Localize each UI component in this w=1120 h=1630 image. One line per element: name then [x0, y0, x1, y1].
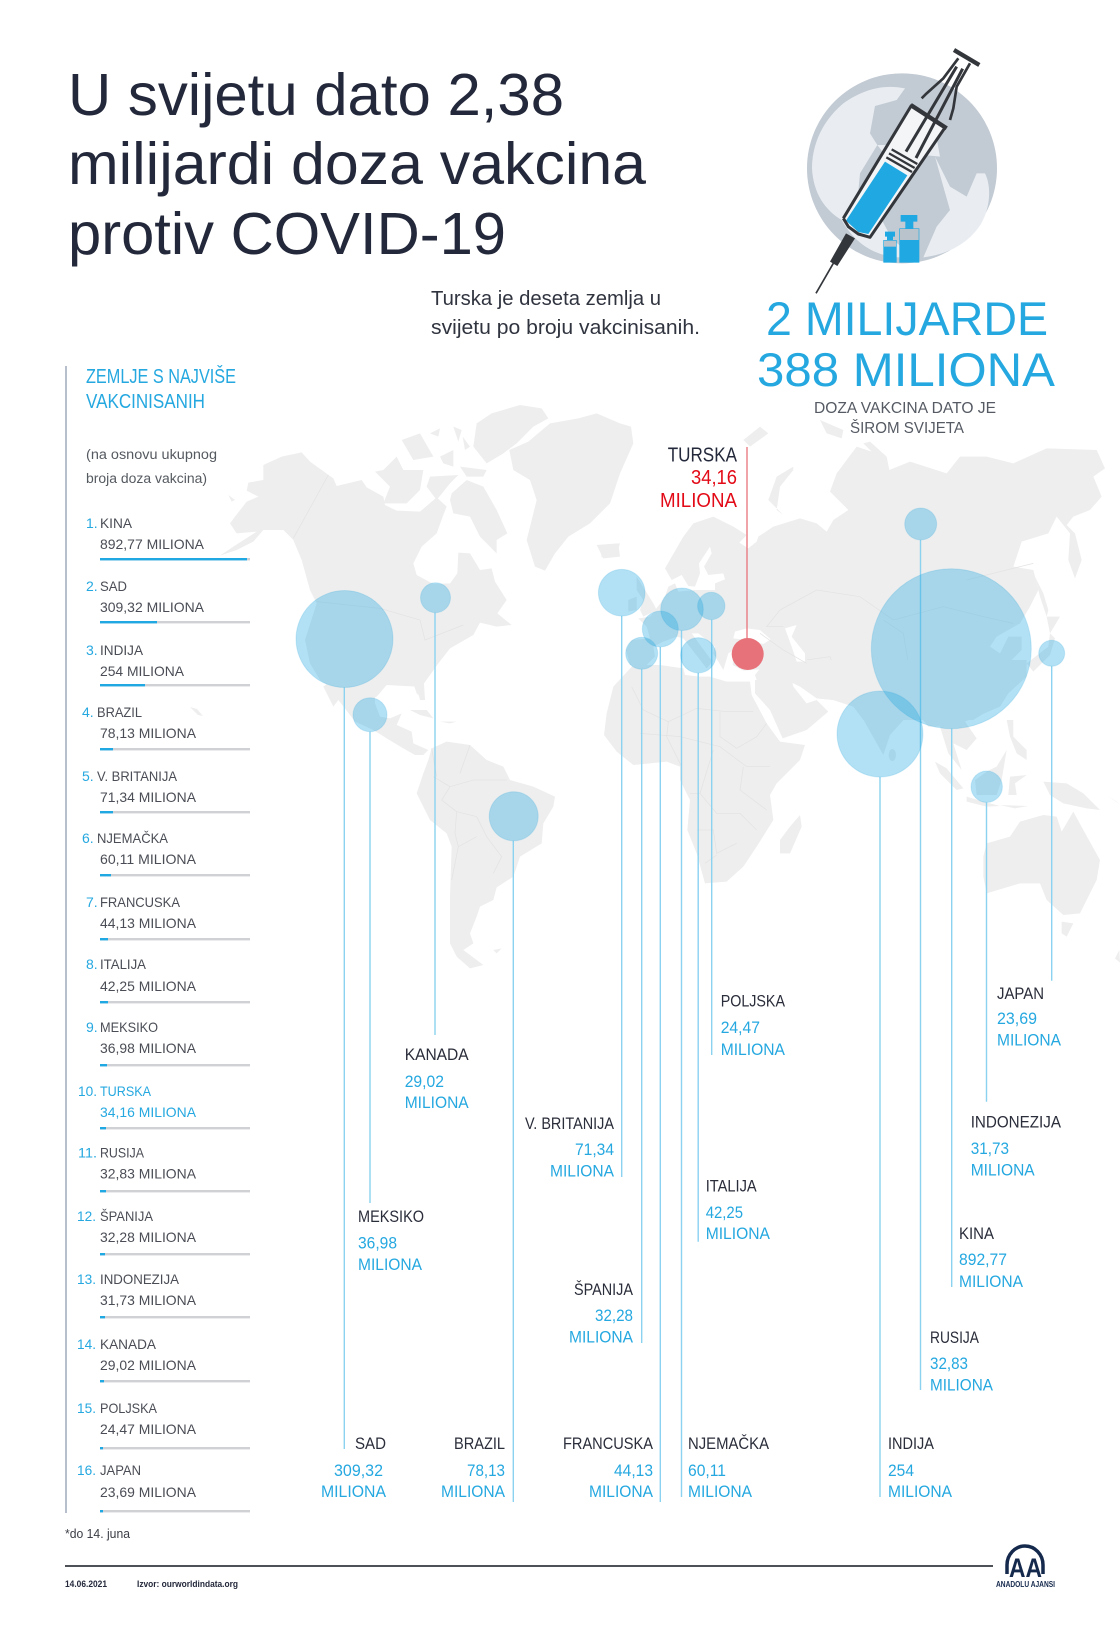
big number caption: ŠIROM SVIJETA	[850, 420, 965, 437]
title: U svijetu dato 2,38	[68, 62, 564, 128]
label: Kina: 892,77	[959, 1250, 1007, 1269]
row 7	[86, 894, 250, 940]
row 12: ŠPANIJA	[100, 1208, 154, 1224]
row 9	[86, 1019, 250, 1066]
list heading: VAKCINISANIH	[86, 391, 205, 413]
label: Poljska: MILIONA	[721, 1040, 786, 1059]
row 5: V. BRITANIJA	[97, 768, 178, 784]
row 13: INDONEZIJA	[100, 1271, 180, 1287]
label: Kina: KINA	[959, 1224, 995, 1243]
icon: globe with syringe and vials	[807, 50, 997, 293]
label: Brazil: MILIONA	[441, 1482, 506, 1501]
label: Rusija: RUSIJA	[930, 1328, 980, 1347]
label: Brazil	[441, 1434, 506, 1501]
label: Španija: ŠPANIJA	[574, 1280, 634, 1299]
row 11: RUSIJA	[100, 1144, 145, 1160]
label: Španija: 32,28	[595, 1306, 633, 1325]
row 2	[86, 578, 250, 623]
label: Japan: 23,69	[997, 1009, 1037, 1028]
row 13: 13.	[77, 1271, 96, 1287]
vials	[883, 215, 919, 263]
big number: 2 MILIJARDE	[766, 292, 1048, 345]
label: Italija	[706, 1177, 771, 1243]
label: Francuska: 44,13	[614, 1461, 653, 1480]
label: Italija: MILIONA	[706, 1224, 771, 1243]
label: Rusija	[930, 1328, 994, 1395]
world map	[190, 405, 1120, 968]
row 3: 254 MILIONA	[100, 663, 185, 679]
row 1: 892,77 MILIONA	[100, 536, 205, 552]
icon: Anadolu Ajansi logo: AA	[1009, 1553, 1042, 1583]
row 4: BRAZIL	[97, 704, 142, 720]
icon: Anadolu Ajansi logo: ANADOLU AJANSI	[996, 1580, 1055, 1589]
list note: broja doza vakcina)	[86, 471, 207, 486]
label: Kina	[959, 1224, 1024, 1291]
row 14	[77, 1336, 250, 1382]
label: Francuska: FRANCUSKA	[563, 1434, 654, 1453]
label: Japan	[997, 984, 1062, 1050]
label: Japan: JAPAN	[997, 984, 1044, 1003]
label: Poljska	[721, 992, 786, 1059]
footer date and source	[65, 1579, 238, 1590]
row 13	[77, 1271, 250, 1318]
label: Indonezija: INDONEZIJA	[971, 1113, 1062, 1132]
list note: (na osnovu ukupnog	[86, 447, 217, 462]
label: V. Britanija: MILIONA	[550, 1162, 615, 1181]
label: Njemačka: MILIONA	[688, 1482, 753, 1501]
row 8	[86, 956, 250, 1003]
row 15: POLJSKA	[100, 1400, 158, 1416]
row 15	[77, 1400, 250, 1449]
callout: Turska: 34,16	[691, 467, 737, 489]
label: Indonezija: MILIONA	[971, 1161, 1035, 1180]
row 10	[78, 1083, 250, 1129]
label: Španija	[569, 1280, 634, 1347]
row 1	[86, 515, 250, 560]
big number: 388 MILIONA	[757, 343, 1056, 396]
label: Poljska: POLJSKA	[721, 992, 786, 1011]
label: Italija: 42,25	[706, 1203, 743, 1222]
row 16: 23,69 MILIONA	[100, 1484, 197, 1500]
row 6: 60,11 MILIONA	[100, 851, 197, 867]
label: Italija: ITALIJA	[706, 1177, 757, 1196]
row 13: 31,73 MILIONA	[100, 1292, 197, 1308]
list heading	[86, 365, 236, 413]
label: Indonezija: 31,73	[971, 1139, 1009, 1158]
icon: Anadolu Ajansi logo	[996, 1546, 1055, 1589]
footnote: *do 14. juna	[65, 1526, 131, 1541]
big number caption	[814, 400, 996, 437]
label: Japan: MILIONA	[997, 1031, 1062, 1050]
row 2: 309,32 MILIONA	[100, 599, 205, 615]
row 7: FRANCUSKA	[100, 894, 181, 910]
row 2: SAD	[100, 578, 127, 594]
callout: Turska: MILIONA	[660, 490, 738, 512]
row 6	[82, 830, 250, 876]
footer date and source: Izvor: ourworldindata.org	[137, 1579, 238, 1590]
label: Njemačka: 60,11	[688, 1461, 726, 1480]
row 14: KANADA	[100, 1336, 157, 1352]
label: Njemačka: NJEMAČKA	[688, 1434, 770, 1453]
row 8: 42,25 MILIONA	[100, 978, 197, 994]
label: Njemačka	[688, 1434, 770, 1501]
row 3: 3.	[86, 642, 98, 658]
row 6: 6.	[82, 830, 94, 846]
row 3: INDIJA	[100, 642, 144, 658]
label: Kanada: 29,02	[405, 1072, 444, 1091]
row 4: 78,13 MILIONA	[100, 725, 197, 741]
Turkey marker	[732, 447, 764, 670]
row 8: 8.	[86, 956, 98, 972]
row 10: 10.	[78, 1083, 97, 1099]
label: Kanada: MILIONA	[405, 1093, 469, 1112]
label: Kanada: KANADA	[405, 1045, 469, 1064]
row 14: 29,02 MILIONA	[100, 1357, 197, 1373]
syringe	[816, 50, 979, 293]
label: Meksiko: MILIONA	[358, 1255, 423, 1274]
row 5	[82, 768, 250, 813]
label: Francuska	[563, 1434, 654, 1501]
label: V. Britanija: 71,34	[575, 1140, 614, 1159]
subtitle: svijetu po broju vakcinisanih.	[431, 317, 700, 339]
big number	[757, 292, 1056, 396]
row 12	[77, 1208, 250, 1255]
subtitle	[431, 288, 700, 339]
footer date and source: 14.06.2021	[65, 1579, 108, 1590]
row 4: 4.	[82, 704, 94, 720]
label: V. Britanija: V. BRITANIJA	[525, 1114, 615, 1133]
row 6: NJEMAČKA	[97, 830, 169, 846]
label: SAD: MILIONA	[321, 1482, 387, 1501]
label: Indija: 254	[888, 1461, 914, 1480]
row 4	[82, 704, 250, 750]
row 14: 14.	[77, 1336, 96, 1352]
row 1: 1.	[86, 515, 98, 531]
row 11	[78, 1144, 250, 1192]
row 16: JAPAN	[100, 1462, 141, 1478]
title	[68, 62, 646, 267]
row 9: 36,98 MILIONA	[100, 1040, 197, 1056]
label: Indija	[888, 1434, 953, 1501]
title: protiv COVID-19	[68, 201, 506, 267]
row 16: 16.	[77, 1462, 96, 1478]
row 10: 34,16 MILIONA	[100, 1104, 197, 1120]
row 10: TURSKA	[100, 1083, 152, 1099]
subtitle: Turska je deseta zemlja u	[431, 288, 661, 310]
row 9: 9.	[86, 1019, 98, 1035]
label: Rusija: 32,83	[930, 1354, 968, 1373]
callout: Turska: TURSKA	[668, 445, 738, 467]
row 3	[86, 642, 250, 686]
bubbles on map	[296, 508, 1065, 841]
label: Indija: MILIONA	[888, 1482, 953, 1501]
label: V. Britanija	[525, 1114, 615, 1181]
label: Indija: INDIJA	[888, 1434, 935, 1453]
label: Kanada	[405, 1045, 469, 1112]
row 5: 71,34 MILIONA	[100, 789, 197, 805]
row 7: 44,13 MILIONA	[100, 915, 197, 931]
row 8: ITALIJA	[100, 956, 147, 972]
label: SAD: 309,32	[334, 1461, 383, 1480]
row 7: 7.	[86, 894, 98, 910]
big number caption: DOZA VAKCINA DATO JE	[814, 400, 996, 417]
label: Meksiko: MEKSIKO	[358, 1207, 424, 1226]
label: Poljska: 24,47	[721, 1018, 760, 1037]
label: Brazil: BRAZIL	[454, 1434, 505, 1453]
row 12: 32,28 MILIONA	[100, 1229, 197, 1245]
panel: ranking list	[65, 365, 250, 1513]
label: SAD	[321, 1434, 387, 1501]
row 11: 32,83 MILIONA	[100, 1166, 197, 1182]
label: Rusija: MILIONA	[930, 1376, 994, 1395]
row 15: 15.	[77, 1400, 96, 1416]
row 2: 2.	[86, 578, 98, 594]
label: Brazil: 78,13	[467, 1461, 505, 1480]
row 9: MEKSIKO	[100, 1019, 158, 1035]
title: milijardi doza vakcina	[68, 131, 646, 197]
connector lines	[344, 540, 1052, 1502]
list note	[86, 447, 217, 486]
label: Meksiko: 36,98	[358, 1234, 397, 1253]
label: Indonezija	[971, 1113, 1062, 1180]
row 1: KINA	[100, 515, 133, 531]
label: SAD: SAD	[355, 1434, 386, 1453]
row 16	[77, 1462, 250, 1512]
list heading: ZEMLJE S NAJVIŠE	[86, 365, 236, 388]
label: Francuska: MILIONA	[589, 1482, 654, 1501]
label: Španija: MILIONA	[569, 1328, 634, 1347]
footer rule	[65, 1565, 993, 1567]
row 5: 5.	[82, 768, 94, 784]
label: Meksiko	[358, 1207, 424, 1274]
row 12: 12.	[77, 1208, 96, 1224]
callout: Turska	[660, 445, 738, 512]
label: Kina: MILIONA	[959, 1272, 1024, 1291]
row 11: 11.	[78, 1144, 97, 1160]
row 15: 24,47 MILIONA	[100, 1421, 197, 1437]
